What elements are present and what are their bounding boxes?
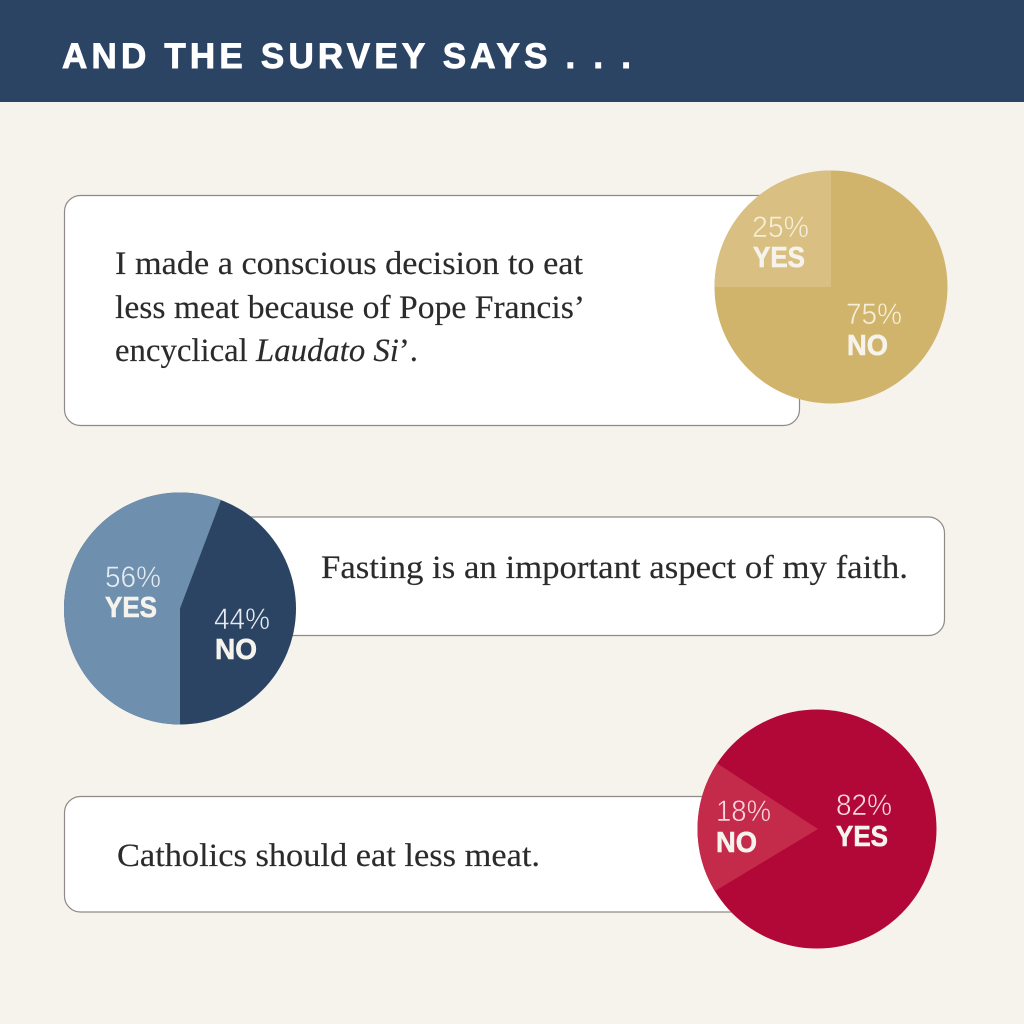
label: 56% yes — [105, 561, 161, 624]
label: 25% yes — [752, 211, 809, 274]
statement 1 text — [115, 246, 585, 369]
label: 18% no: 18% — [716, 795, 771, 828]
statement 2 text: Fasting is an important aspect of my faith. — [321, 550, 908, 586]
pie chart: 56% yes, 44% no — [64, 492, 296, 724]
label: 44% no — [214, 603, 270, 666]
title: AND THE SURVEY SAYS . . . — [62, 37, 631, 76]
statement 1 text: I made a conscious decision to eat — [115, 246, 583, 282]
panel: survey statement 2 — [200, 517, 944, 636]
label: 56% yes: YES — [105, 592, 157, 624]
label: 82% yes — [836, 789, 892, 853]
pie chart: 82% yes, 18% no — [697, 710, 936, 948]
label: 18% no — [716, 795, 771, 859]
label: 44% no: 44% — [214, 603, 270, 636]
label: 75% no — [846, 298, 902, 362]
label: 82% yes: YES — [836, 821, 888, 853]
statement 3 text: Catholics should eat less meat. — [117, 838, 540, 874]
label: 75% no: 75% — [846, 298, 902, 331]
panel: survey statement 3 — [64, 796, 764, 912]
label: 82% yes: 82% — [836, 789, 892, 822]
label: 56% yes: 56% — [105, 561, 161, 594]
panel: survey statement 1 — [64, 196, 800, 426]
statement 1 text: encyclical Laudato Si’. — [115, 333, 418, 369]
label: 75% no: NO — [847, 330, 888, 362]
label: 44% no: NO — [215, 634, 257, 666]
label: 25% yes: 25% — [752, 211, 809, 244]
label: 25% yes: YES — [753, 242, 805, 274]
statement 1 text: less meat because of Pope Francis’ — [115, 290, 585, 326]
pie chart: 25% yes, 75% no — [714, 170, 948, 404]
header banner — [0, 0, 1024, 102]
label: 18% no: NO — [716, 827, 757, 859]
